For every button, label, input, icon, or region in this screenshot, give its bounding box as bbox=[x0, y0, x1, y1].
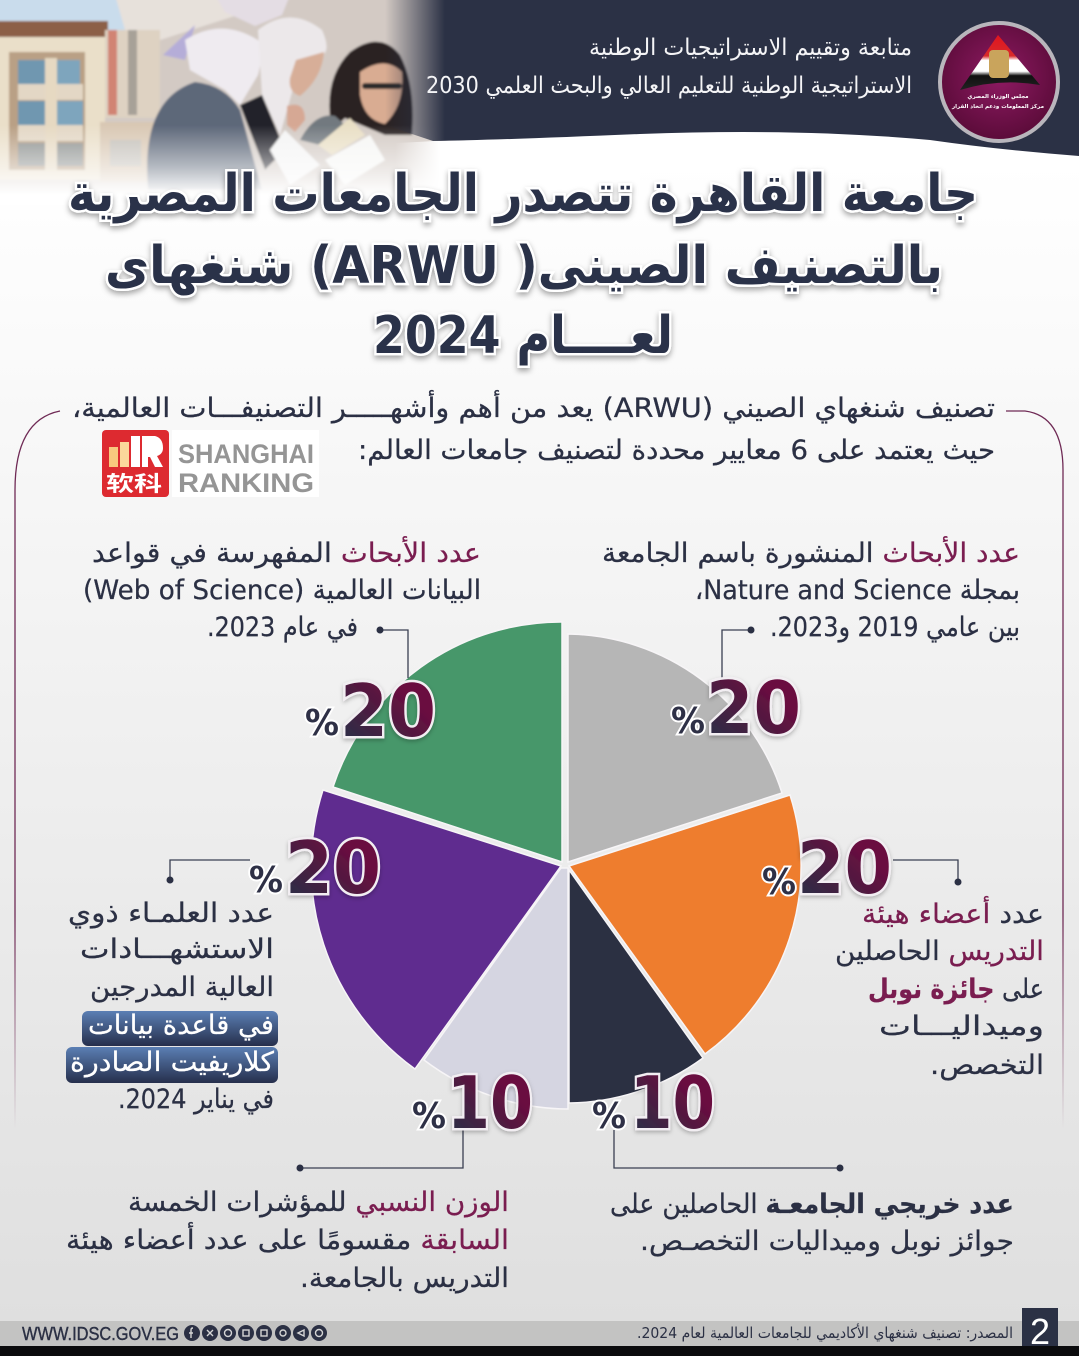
label: 20% purple: % bbox=[249, 860, 283, 901]
slice: orange 20 bbox=[569, 795, 801, 1054]
text: Clarivate highly cited: العالية المدرجين bbox=[90, 972, 274, 1003]
page number: 2 bbox=[1030, 1311, 1050, 1352]
text: faculty Nobel: عدد أعضاء هيئة bbox=[862, 895, 1044, 930]
text: faculty Nobel: وميداليـــات bbox=[879, 1011, 1044, 1042]
logo: Shanghai Ranking: 软科 bbox=[106, 468, 162, 498]
highlight pill: first line bbox=[82, 1011, 278, 1046]
logo: Shanghai Ranking: RANKING bbox=[178, 468, 314, 498]
text: indexed in Web of Science: البيانات العالمية (Web of Science) bbox=[83, 575, 481, 606]
text: alumni Nobel: جوائز نوبل وميداليات التخصـص. bbox=[640, 1226, 1014, 1257]
intro text: تصنيف شنغهاي الصيني (ARWU) يعد من أهم وأشهـــــر التصنيفـــات العالمية، bbox=[72, 389, 995, 424]
text: Clarivate highly cited: عدد العلمـاء ذوي bbox=[68, 898, 274, 929]
title bbox=[68, 164, 978, 366]
text: published in Nature and Science: بين عامي 2019 و2023. bbox=[770, 612, 1020, 643]
logo: Shanghai Ranking: SHANGHAI bbox=[178, 439, 314, 469]
building bbox=[0, 21, 160, 182]
text: alumni Nobel: عدد خريجي الجامعـة الحاصلين على bbox=[610, 1189, 1014, 1220]
text: Clarivate highly cited: كلاريفيت الصادرة bbox=[70, 1047, 274, 1078]
intro text bbox=[72, 389, 995, 466]
label: 10% navy: % bbox=[592, 1096, 626, 1137]
logo: IDSC emblem: مركز المعلومات ودعم اتخاذ القرار bbox=[951, 103, 1044, 110]
slice: light 10 bbox=[424, 868, 568, 1109]
label: 10% light: % bbox=[412, 1096, 446, 1137]
slice: purple 20 bbox=[311, 790, 561, 1069]
decorative frame bbox=[1006, 411, 1063, 1130]
text: faculty Nobel bbox=[835, 895, 1044, 1081]
footer social icons bbox=[184, 1325, 327, 1341]
text: Clarivate highly cited bbox=[66, 898, 278, 1115]
slice: green 20 bbox=[333, 622, 562, 862]
label: 20% orange: % bbox=[762, 862, 796, 903]
text: indexed in Web of Science bbox=[83, 535, 481, 643]
text: Clarivate highly cited: في يناير 2024. bbox=[118, 1084, 274, 1115]
footer source: المصدر: تصنيف شنغهاي الأكاديمي للجامعات العالمية لعام 2024. bbox=[637, 1323, 1013, 1343]
label: 20% green: 20 bbox=[340, 669, 436, 753]
label: 10% light bbox=[412, 1061, 533, 1145]
text: indexed in Web of Science: عدد الأبحاث المفهرسة في قواعد bbox=[92, 535, 481, 569]
header text bbox=[426, 35, 912, 99]
title: جامعة القاهرة تتصدر الجامعات المصرية bbox=[68, 164, 978, 224]
text: per capita bbox=[66, 1187, 509, 1294]
text: per capita: السابقة مقسومًا على عدد أعضاء هيئة bbox=[66, 1221, 509, 1256]
header text: متابعة وتقييم الاستراتيجيات الوطنية bbox=[589, 35, 912, 61]
text: published in Nature and Science: عدد الأبحاث المنشورة باسم الجامعة bbox=[602, 535, 1020, 569]
label: 10% light: 10 bbox=[447, 1061, 533, 1145]
label: 10% navy bbox=[592, 1061, 715, 1145]
text: indexed in Web of Science: في عام 2023. bbox=[207, 612, 358, 643]
logo: IDSC emblem: مجلس الوزراء المصري bbox=[967, 94, 1029, 100]
header dark band bbox=[385, 0, 1079, 156]
wave: white below band bbox=[395, 134, 640, 200]
photo bottom fade bbox=[0, 125, 475, 195]
label: 20% grey: % bbox=[671, 701, 705, 742]
text: published in Nature and Science: بمجلة Nature and Science، bbox=[695, 575, 1020, 606]
slice: grey 20 bbox=[568, 634, 782, 862]
label: 20% grey: 20 bbox=[706, 666, 801, 750]
label: 10% navy: 10 bbox=[630, 1061, 715, 1145]
students bbox=[215, 0, 290, 26]
text: Clarivate highly cited: في قاعدة بيانات bbox=[88, 1010, 274, 1041]
text: Clarivate highly cited: الاستشهـــادات bbox=[80, 934, 274, 965]
title: بالتصنيف الصينى( ARWU) شنغهاى bbox=[105, 236, 943, 296]
logo: IDSC emblem bbox=[940, 23, 1058, 141]
title: لعــــام 2024 bbox=[373, 306, 673, 366]
intro text: حيث يعتمد على 6 معايير محددة لتصنيف جامعات العالم: bbox=[358, 435, 995, 466]
page number bbox=[1022, 1308, 1058, 1352]
text: faculty Nobel: التدريس الحاصلين bbox=[835, 936, 1044, 967]
text: per capita: الوزن النسبي للمؤشرات الخمسة bbox=[128, 1187, 509, 1218]
footer website: WWW.IDSC.GOV.EG bbox=[22, 1324, 179, 1344]
label: 20% orange: 20 bbox=[797, 826, 892, 910]
header text: الاستراتيجية الوطنية للتعليم العالي والبحث العلمي 2030 bbox=[426, 73, 912, 99]
text: per capita: التدريس بالجامعة. bbox=[300, 1263, 509, 1294]
footer band bbox=[0, 1321, 1079, 1346]
text: faculty Nobel: التخصص. bbox=[930, 1050, 1044, 1081]
logo: Shanghai Ranking bbox=[102, 430, 319, 498]
label: 20% purple: 20 bbox=[285, 826, 381, 910]
text: alumni Nobel bbox=[610, 1189, 1014, 1257]
header photo collage bbox=[0, 0, 465, 195]
slice: navy 10 bbox=[569, 870, 703, 1103]
text: published in Nature and Science bbox=[602, 535, 1020, 643]
label: 20% green: % bbox=[305, 703, 339, 744]
highlight pill: second line bbox=[66, 1047, 278, 1083]
text: faculty Nobel: على جائزة نوبل bbox=[868, 974, 1044, 1005]
pie chart bbox=[311, 622, 801, 1109]
leader lines bbox=[166, 626, 962, 1172]
